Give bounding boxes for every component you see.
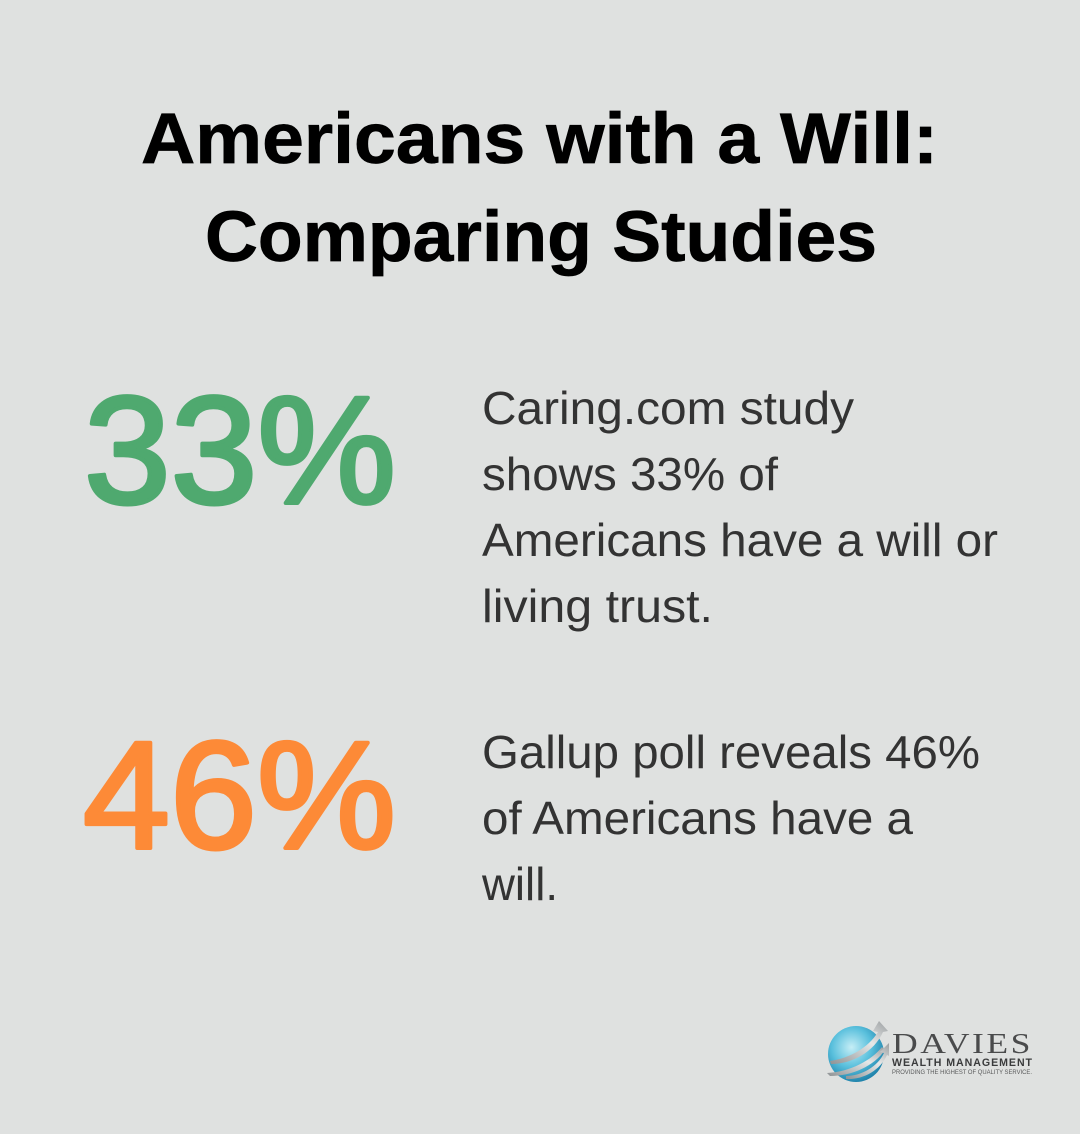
- icon: globe with arrows: [827, 1021, 889, 1082]
- title: Comparing Studies: [205, 198, 877, 277]
- text block: Caring.com description: shows 33% of: [482, 448, 778, 500]
- text block: Gallup description: of Americans have a: [482, 792, 913, 844]
- text block: Caring.com description: Caring.com study: [482, 382, 854, 434]
- title: Americans with a Will:: [141, 100, 938, 179]
- logo tagline: PROVIDING THE HIGHEST OF QUALITY SERVICE.: [892, 1069, 1032, 1076]
- statistic: 33%: 33%: [84, 365, 396, 536]
- panel: Caring.com study: [84, 365, 998, 632]
- panel: Gallup poll: [83, 710, 980, 910]
- text block: Caring.com description: [482, 382, 998, 632]
- logo wordmark: DAVIES: [892, 1029, 1033, 1060]
- title: [141, 100, 938, 277]
- text block: Gallup description: [481, 726, 980, 910]
- logo: Davies Wealth Management: [827, 1021, 1033, 1082]
- statistic: 46%: 46%: [83, 710, 396, 881]
- logo subtitle: WEALTH MANAGEMENT: [892, 1057, 1033, 1069]
- text block: Gallup description: will.: [481, 858, 558, 910]
- text block: Caring.com description: living trust.: [482, 580, 713, 632]
- text block: Gallup description: Gallup poll reveals 46%: [482, 726, 980, 778]
- text block: Caring.com description: Americans have a will or: [482, 514, 998, 566]
